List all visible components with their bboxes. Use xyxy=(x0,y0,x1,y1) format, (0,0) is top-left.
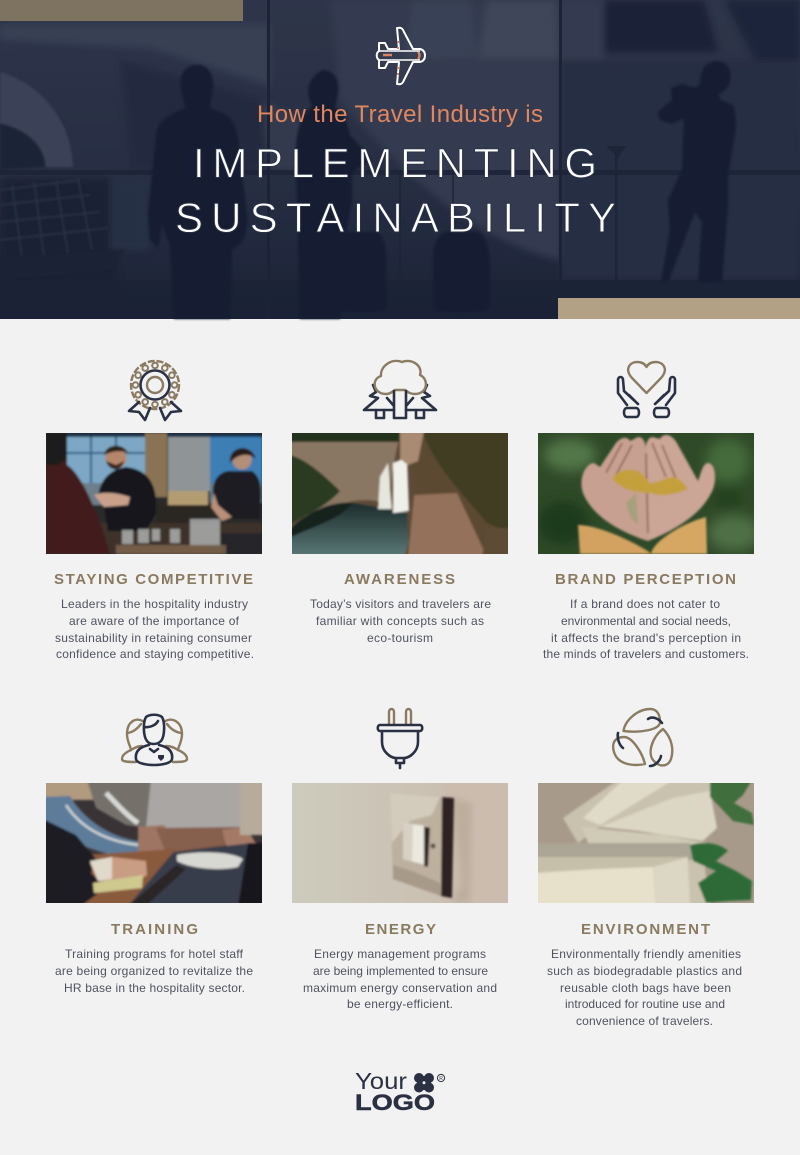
description xyxy=(55,947,253,995)
silhouettes xyxy=(148,61,736,319)
description: introduced for routine use and xyxy=(565,997,725,1011)
description: convenience of travelers. xyxy=(576,1014,713,1028)
description: such as biodegradable plastics and xyxy=(547,964,742,978)
description: the minds of travelers and customers. xyxy=(543,647,749,661)
icon: hands and heart xyxy=(618,362,675,417)
icon: plug xyxy=(378,709,422,768)
panel: environment xyxy=(535,709,754,1028)
photo: bartenders xyxy=(46,433,262,554)
heading: BRAND PERCEPTION xyxy=(555,571,736,588)
title: SUSTAINABILITY xyxy=(175,194,616,241)
darkening overlay xyxy=(0,0,800,319)
description: confidence and staying competitive. xyxy=(56,647,254,661)
panel: hero header xyxy=(0,0,800,319)
window frame xyxy=(0,0,800,319)
icon: trees xyxy=(364,361,436,418)
description xyxy=(547,947,742,1028)
engine arc xyxy=(0,72,73,167)
icon: airplane xyxy=(377,28,425,84)
description: Training programs for hotel staff xyxy=(65,947,244,961)
description xyxy=(303,947,497,1011)
heading: ENVIRONMENT xyxy=(581,921,710,938)
heading: STAYING COMPETITIVE xyxy=(54,571,253,588)
icon: medal xyxy=(129,361,181,420)
description: Energy management programs xyxy=(314,947,486,961)
description: Today’s visitors and travelers are xyxy=(310,597,491,611)
icon: recycling leaves xyxy=(613,709,672,766)
heading: TRAINING xyxy=(111,921,198,938)
icon: people xyxy=(122,715,187,765)
description: are being implemented to ensure xyxy=(313,964,488,978)
description: HR base in the hospitality sector. xyxy=(64,981,245,995)
photo: meeting xyxy=(46,783,262,903)
description xyxy=(310,597,491,645)
description: familiar with concepts such as xyxy=(316,614,484,628)
description: it affects the brand's perception in xyxy=(551,631,741,645)
accent bar: bottom right xyxy=(558,298,800,319)
panel: staying competitive xyxy=(41,361,267,661)
panel: training xyxy=(43,715,265,995)
title xyxy=(175,140,616,241)
subtitle: How the Travel Industry is xyxy=(257,101,543,128)
description: maximum energy conservation and xyxy=(303,981,497,995)
panel: energy xyxy=(292,709,508,1011)
logo mark xyxy=(414,1073,434,1092)
description: be energy-efficient. xyxy=(347,997,453,1011)
heading: AWARENESS xyxy=(344,571,455,588)
logo text: Your xyxy=(355,1068,407,1094)
heading: ENERGY xyxy=(365,921,436,938)
description xyxy=(55,597,254,661)
logo: LOGO xyxy=(355,1090,435,1115)
description: Leaders in the hospitality industry xyxy=(61,597,248,611)
description: are aware of the importance of xyxy=(69,614,240,628)
photo: waterfall xyxy=(292,433,508,554)
photo: cloth bags xyxy=(538,783,754,903)
panel: awareness xyxy=(289,361,511,645)
logo xyxy=(355,1068,445,1115)
registered mark: R xyxy=(439,1076,443,1082)
description: Environmentally friendly amenities xyxy=(551,947,741,961)
accent bar: top left xyxy=(0,0,243,21)
description: are being organized to revitalize the xyxy=(55,964,253,978)
photo: hands holding flowers xyxy=(538,433,754,554)
title: IMPLEMENTING xyxy=(193,140,597,186)
bench xyxy=(0,178,108,258)
panel: brand perception xyxy=(537,362,760,661)
description: sustainability in retaining consumer xyxy=(55,631,252,645)
description: If a brand does not cater to xyxy=(570,597,720,611)
hero photo: airport silhouettes xyxy=(0,0,800,319)
description xyxy=(543,597,749,661)
photo: light switch xyxy=(292,783,508,903)
description: reusable cloth bags have been xyxy=(560,981,731,995)
description: eco-tourism xyxy=(367,631,433,645)
description: environmental and social needs, xyxy=(561,614,731,628)
